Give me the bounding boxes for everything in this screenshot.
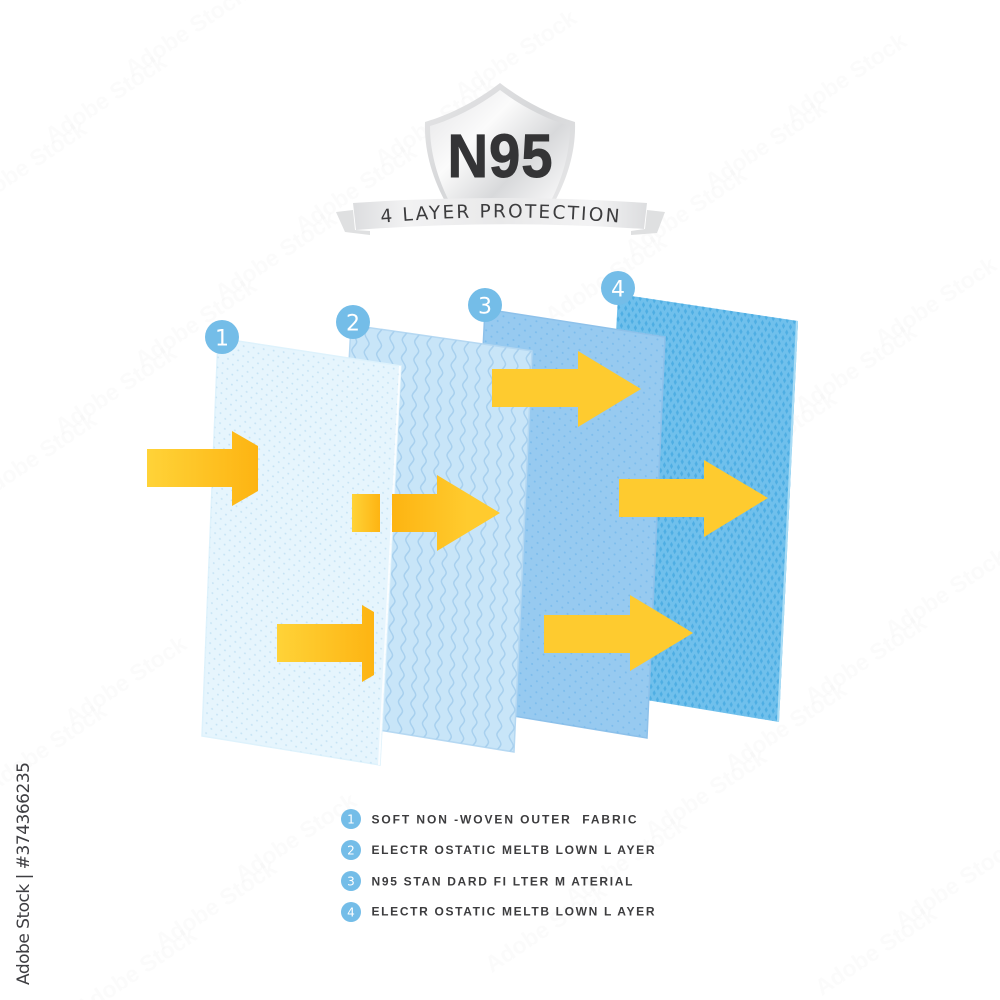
panel: layer 3 N95 filter bbox=[465, 309, 665, 738]
watermark: Adobe Stock bbox=[700, 94, 831, 194]
watermark: Adobe Stock bbox=[640, 743, 771, 843]
watermark: Adobe Stock bbox=[370, 71, 501, 171]
legend item 3: N95 STAN DARD FI LTER M ATERIAL bbox=[372, 874, 632, 888]
badge: layer number 1: 1 bbox=[215, 326, 229, 352]
watermark: Adobe Stock bbox=[290, 138, 421, 238]
panel: layer 4 electrostatic meltblown bbox=[598, 294, 798, 722]
watermark: Adobe Stock bbox=[230, 787, 361, 887]
arrow: layer 3 lower bbox=[544, 595, 693, 671]
legend item 2 bbox=[341, 840, 655, 860]
watermark: Adobe Stock bbox=[870, 251, 1000, 351]
watermark: Adobe Stock bbox=[560, 810, 691, 910]
watermark: Adobe Stock bbox=[720, 676, 851, 776]
badge: layer number 3 bbox=[468, 288, 502, 322]
arrow: layer 3 upper bbox=[492, 351, 641, 427]
legend item 4: ELECTR OSTATIC MELTB LOWN L AYER bbox=[372, 904, 655, 918]
legend item 1: 1 bbox=[347, 812, 355, 826]
badge: layer number 1 bbox=[205, 320, 239, 354]
legend bbox=[341, 809, 655, 922]
arrow: layer 1 lower bbox=[277, 605, 374, 682]
watermark: Adobe Stock bbox=[50, 339, 181, 439]
watermark: Adobe Stock bbox=[710, 385, 841, 485]
legend item 4 bbox=[341, 902, 655, 922]
watermark: Adobe Stock bbox=[60, 630, 191, 730]
watermark: Adobe Stock bbox=[150, 854, 281, 954]
legend item 3 bbox=[341, 871, 632, 891]
arrow: layer 2 main bbox=[392, 475, 500, 551]
watermark: Adobe Stock bbox=[130, 272, 261, 372]
icon: N95 shield badge bbox=[425, 83, 575, 205]
legend item 1 bbox=[341, 809, 637, 829]
panel: layer 2 wavy meltblown bbox=[348, 327, 533, 753]
watermark: Adobe Stock bbox=[480, 877, 611, 977]
legend item 3: 3 bbox=[347, 874, 355, 888]
badge: layer number 2 bbox=[336, 305, 370, 339]
legend item 2: ELECTR OSTATIC MELTB LOWN L AYER bbox=[372, 843, 655, 857]
ribbon banner bbox=[336, 198, 665, 235]
watermark: Adobe Stock bbox=[810, 900, 941, 1000]
badge: layer number 2: 2 bbox=[346, 312, 360, 336]
arrow: layer 4 passing bbox=[619, 460, 768, 537]
badge: layer number 3: 3 bbox=[478, 294, 492, 320]
arrow: layer 2 tail block bbox=[352, 494, 380, 532]
watermark: Adobe Stock bbox=[790, 318, 921, 418]
heading: 4 layer protection: 4 LAYER PROTECTION bbox=[382, 204, 618, 222]
watermark: Adobe Stock bbox=[780, 27, 911, 127]
watermark: Adobe Stock bbox=[620, 161, 751, 261]
arrow: layer 1 upper bbox=[147, 431, 258, 506]
legend item 4: 4 bbox=[347, 906, 355, 920]
legend item 1: SOFT NON -WOVEN OUTER FABRIC bbox=[372, 812, 637, 826]
panel: layer 1 soft non-woven bbox=[202, 338, 401, 765]
watermark: Adobe Stock bbox=[210, 205, 341, 305]
watermark: Adobe Stock bbox=[450, 4, 581, 104]
side credit text: Adobe Stock | #374366235 bbox=[14, 762, 34, 985]
legend item 2: 2 bbox=[347, 844, 355, 858]
badge: layer number 4: 4 bbox=[611, 278, 625, 302]
watermark: Adobe Stock bbox=[540, 228, 671, 328]
badge: layer number 4 bbox=[601, 271, 635, 305]
heading: N95: N95 bbox=[448, 122, 554, 190]
watermark: Adobe Stock bbox=[800, 609, 931, 709]
watermark: Adobe Stock bbox=[40, 48, 171, 148]
